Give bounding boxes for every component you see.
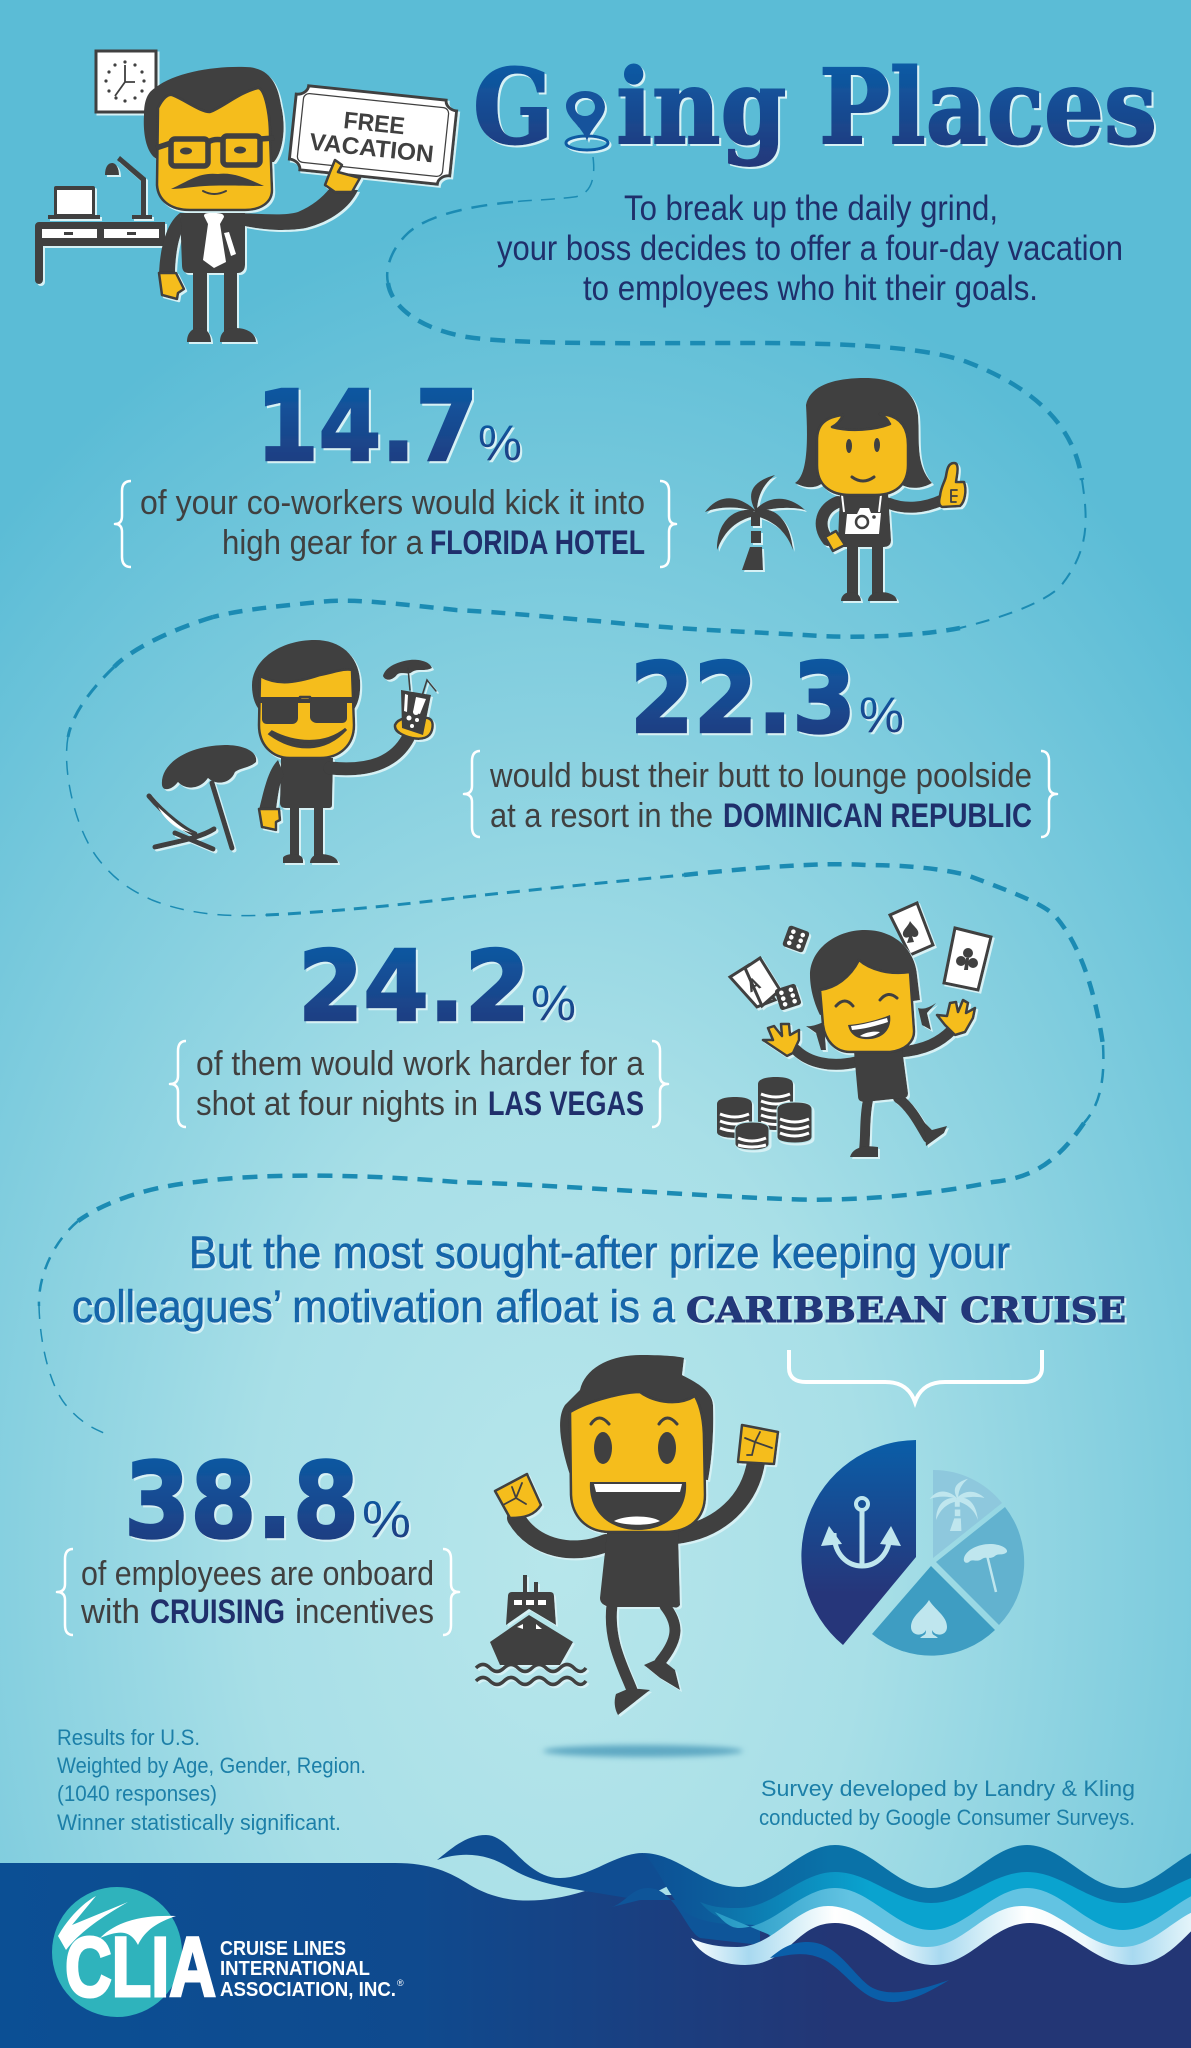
wave layer: light blue (715, 1888, 1191, 1970)
wave layer: deep teal (643, 1845, 1191, 1960)
description: with (80, 1593, 140, 1631)
body (600, 1533, 680, 1608)
number: % (531, 975, 576, 1031)
legs (611, 1605, 680, 1715)
character: boss with desk and ticket (35, 51, 458, 342)
icon: desk lamp (105, 156, 152, 219)
number: % (362, 1491, 411, 1549)
description: at a resort in the (490, 797, 713, 835)
camera (842, 495, 881, 534)
footer band with waves (0, 1835, 1191, 2048)
dice (774, 983, 802, 1011)
slice: Florida (933, 1470, 1002, 1558)
title: Going Places: Going Places (473, 47, 1157, 168)
spade card (890, 903, 933, 955)
intro text: To break up the daily grind, (624, 189, 998, 228)
body (159, 213, 256, 342)
logo name: ASSOCIATION, INC. (220, 1979, 396, 2001)
icon: beach umbrella and lounge chair (149, 745, 256, 849)
footnote: survey method: (1040 responses) (57, 1781, 217, 1806)
footnote: survey credit: conducted by Google Consumer Surveys. (759, 1805, 1135, 1830)
logo name: CRUISE LINES (220, 1938, 346, 1960)
hair (795, 378, 932, 488)
character: man with sunglasses and cocktail (252, 640, 436, 863)
logo ship lines (58, 1896, 176, 1950)
number: 14.7 (256, 370, 478, 483)
arms (516, 1518, 606, 1549)
description: incentives (295, 1593, 434, 1631)
description: DOMINICAN REPUBLIC (723, 797, 1032, 835)
navy under waves (745, 1923, 1191, 2048)
footnote: survey method: Winner statistically significant. (57, 1810, 341, 1835)
footnote: survey credit (759, 1776, 1135, 1830)
face (570, 1392, 705, 1532)
limbs (796, 1030, 952, 1157)
club card (944, 928, 991, 990)
character: excited woman juggling (763, 930, 975, 1157)
description (170, 1041, 668, 1127)
footnote: survey method (57, 1725, 366, 1835)
hair (252, 640, 360, 712)
logo name: INTERNATIONAL (220, 1958, 370, 1980)
limbs and body (259, 738, 408, 863)
description: FLORIDA HOTEL (430, 524, 645, 562)
icon: cruise ship (476, 1575, 586, 1684)
stat: 22.3% Dominican Republic (464, 642, 1057, 837)
icon: location pin (566, 91, 608, 150)
footnote: survey credit: Survey developed by Landry & Kling (761, 1776, 1135, 1801)
slice: cruise (801, 1440, 916, 1645)
number: % (478, 415, 522, 471)
icon: spade (911, 1600, 947, 1638)
description (464, 751, 1057, 837)
ticket: FREE VACATION: FREE (342, 107, 406, 140)
mouth (590, 1482, 686, 1530)
navy base (0, 1863, 1191, 2048)
description: high gear for a (222, 524, 423, 562)
description (115, 481, 676, 567)
footnote: survey method: Results for U.S. (57, 1725, 200, 1750)
ace cards (730, 958, 780, 1007)
hair (560, 1355, 713, 1480)
description: CRUISING (150, 1593, 285, 1631)
sunglasses (258, 697, 354, 724)
hand and thumb (825, 531, 845, 551)
number: % (859, 687, 904, 743)
limbs (822, 500, 942, 601)
logo wordmark: CLIA (65, 1920, 216, 2014)
number: 24.2 (298, 930, 530, 1043)
description: shot at four nights in (196, 1085, 478, 1123)
intro text: your boss decides to offer a four-day vacation (497, 229, 1123, 268)
description: would bust their butt to lounge poolside (489, 757, 1032, 795)
icon: palm (930, 1479, 984, 1531)
pigtails (806, 1022, 826, 1050)
cocktail and hand (383, 660, 436, 739)
description: of your co-workers would kick it into (140, 484, 645, 522)
face (817, 414, 908, 495)
footnote: survey method: Weighted by Age, Gender, Region. (57, 1753, 366, 1778)
number: 38.8 (124, 1440, 359, 1562)
logo: CLIA (52, 1887, 404, 2017)
logo name (220, 1938, 404, 2001)
description (57, 1549, 459, 1635)
head (144, 67, 284, 210)
body (838, 493, 891, 547)
logo circle (52, 1887, 182, 2017)
ace cards: A (743, 973, 764, 996)
icon: laptop (48, 186, 100, 219)
icon: wall clock (96, 51, 156, 112)
wave layer: white crest (691, 1906, 1191, 2000)
arm holding ticket (240, 188, 358, 230)
description: of them would work harder for a (196, 1045, 644, 1083)
stat: 14.7% Florida hotel (115, 370, 676, 567)
icons: poker chip stacks (717, 1077, 812, 1150)
icon: desk (35, 222, 165, 284)
body (854, 1048, 908, 1102)
third blue ribbon (770, 1942, 949, 2002)
slice: Vegas (872, 1566, 995, 1656)
face (259, 669, 354, 758)
description: of employees are onboard (81, 1555, 434, 1593)
character: tourist woman with camera (795, 378, 965, 601)
icons: cards and dice (730, 903, 991, 1011)
hand left (259, 809, 280, 830)
statement: Caribbean cruise: colleagues’ motivation afloat is a (72, 1281, 676, 1332)
hand (325, 160, 360, 192)
wave layer: cyan (700, 1872, 1191, 1970)
character: jumping man (495, 1355, 778, 1757)
brace over pie (789, 1350, 1042, 1402)
logo name: ® (397, 1978, 404, 1988)
slice: Dominican (936, 1507, 1024, 1625)
intro text: to employees who hit their goals. (583, 269, 1038, 308)
ticket: FREE VACATION (288, 85, 458, 185)
ground shadow (543, 1745, 743, 1757)
stat: 38.8% cruising (57, 1440, 459, 1635)
intro text (497, 189, 1123, 308)
fists (495, 1425, 778, 1518)
statement: Caribbean cruise: CARIBBEAN CRUISE (686, 1290, 1126, 1331)
stat: 24.2% Las Vegas (170, 930, 668, 1127)
icon: palm tree (705, 475, 805, 570)
second dark ribbon (608, 1888, 760, 1945)
dice (782, 925, 810, 953)
pie chart (801, 1440, 1024, 1656)
icon: anchor (821, 1498, 901, 1566)
statement: Caribbean cruise: But the most sought-after prize keeping your (189, 1227, 1010, 1278)
icon: umbrella (964, 1544, 1007, 1592)
hair (810, 930, 920, 1015)
face (820, 960, 914, 1052)
statement: Caribbean cruise (72, 1227, 1126, 1332)
eyes and brows (591, 1418, 677, 1464)
description: LAS VEGAS (488, 1085, 644, 1123)
hands (763, 1024, 799, 1056)
dashed travel route (39, 157, 1103, 1433)
number: 22.3 (630, 642, 856, 755)
first dark ribbon (437, 1835, 680, 1900)
ticket: FREE VACATION: VACATION (308, 129, 435, 168)
